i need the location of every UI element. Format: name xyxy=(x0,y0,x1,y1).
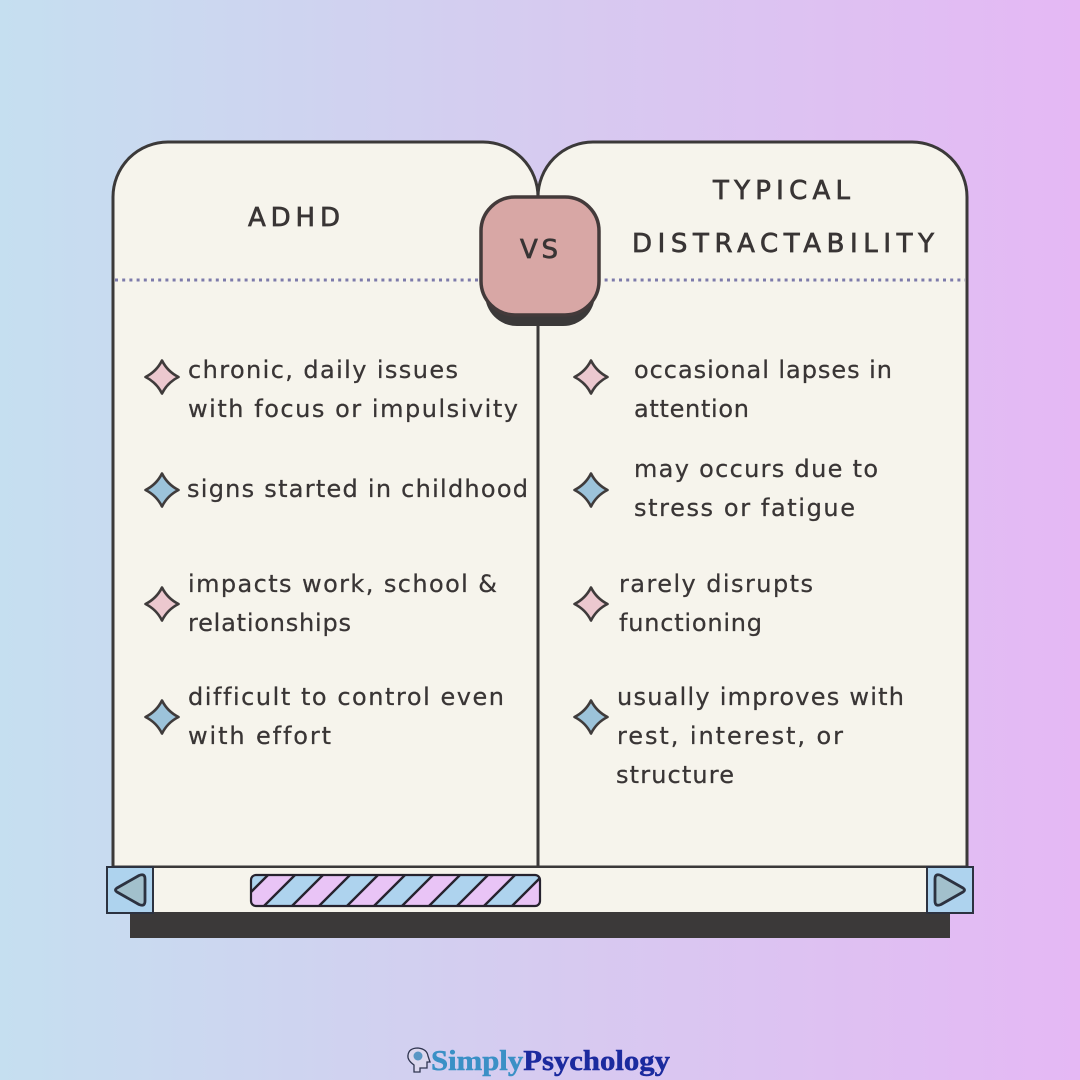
VS badge xyxy=(481,197,599,326)
panel: ADHD page xyxy=(113,142,538,867)
panel: typical distractability page xyxy=(538,142,967,867)
item: stress or fatigue: stress or fatigue xyxy=(634,494,855,522)
logo wordmark: SimplyPsychology xyxy=(431,1045,671,1077)
item: usually improves: rest, interest, or xyxy=(617,722,843,750)
item: difficult to control: with effort xyxy=(188,722,331,750)
icon: left arrow button xyxy=(107,867,153,913)
heading: typical distractability: TYPICAL xyxy=(712,176,850,206)
item: childhood signs: signs started in childhood xyxy=(187,475,528,503)
panel: book window xyxy=(107,142,973,938)
item: stress or fatigue: may occurs due to xyxy=(634,455,878,483)
item: difficult to control: difficult to control even xyxy=(188,683,504,711)
scrollbar thumb xyxy=(209,875,543,906)
item: stress or fatigue xyxy=(574,455,878,522)
item: rarely disrupts: functioning xyxy=(619,609,762,637)
item: impacts: impacts work, school & xyxy=(188,570,497,598)
item: impacts xyxy=(146,570,497,637)
heading: typical distractability xyxy=(632,176,934,259)
scrollbar xyxy=(107,867,973,913)
logo: Simply Psychology xyxy=(408,1045,671,1077)
item: chronic issues xyxy=(146,356,518,423)
item: difficult to control xyxy=(146,683,504,750)
heading: ADHD: ADHD xyxy=(248,203,340,233)
item: occasional lapses: occasional lapses in xyxy=(634,356,892,384)
item: usually improves: structure xyxy=(616,761,734,789)
item: usually improves: usually improves with xyxy=(617,683,904,711)
item: chronic issues: chronic, daily issues xyxy=(188,356,458,384)
header divider xyxy=(115,278,965,282)
item: impacts: relationships xyxy=(188,609,351,637)
base shadow xyxy=(130,913,950,938)
icon: head xyxy=(408,1048,430,1072)
item: rarely disrupts: rarely disrupts xyxy=(619,570,813,598)
item: chronic issues: with focus or impulsivity xyxy=(188,395,518,423)
heading: typical distractability: DISTRACTABILITY xyxy=(632,229,934,259)
item: rarely disrupts xyxy=(574,570,813,637)
VS badge: VS xyxy=(520,235,558,265)
list: typical distractability traits xyxy=(574,356,904,789)
item: occasional lapses: attention xyxy=(634,395,749,423)
list: ADHD traits xyxy=(146,356,528,750)
scrollbar track xyxy=(153,867,927,913)
item: occasional lapses xyxy=(574,356,892,423)
icon: right arrow button xyxy=(927,867,973,913)
item: usually improves xyxy=(574,683,904,789)
